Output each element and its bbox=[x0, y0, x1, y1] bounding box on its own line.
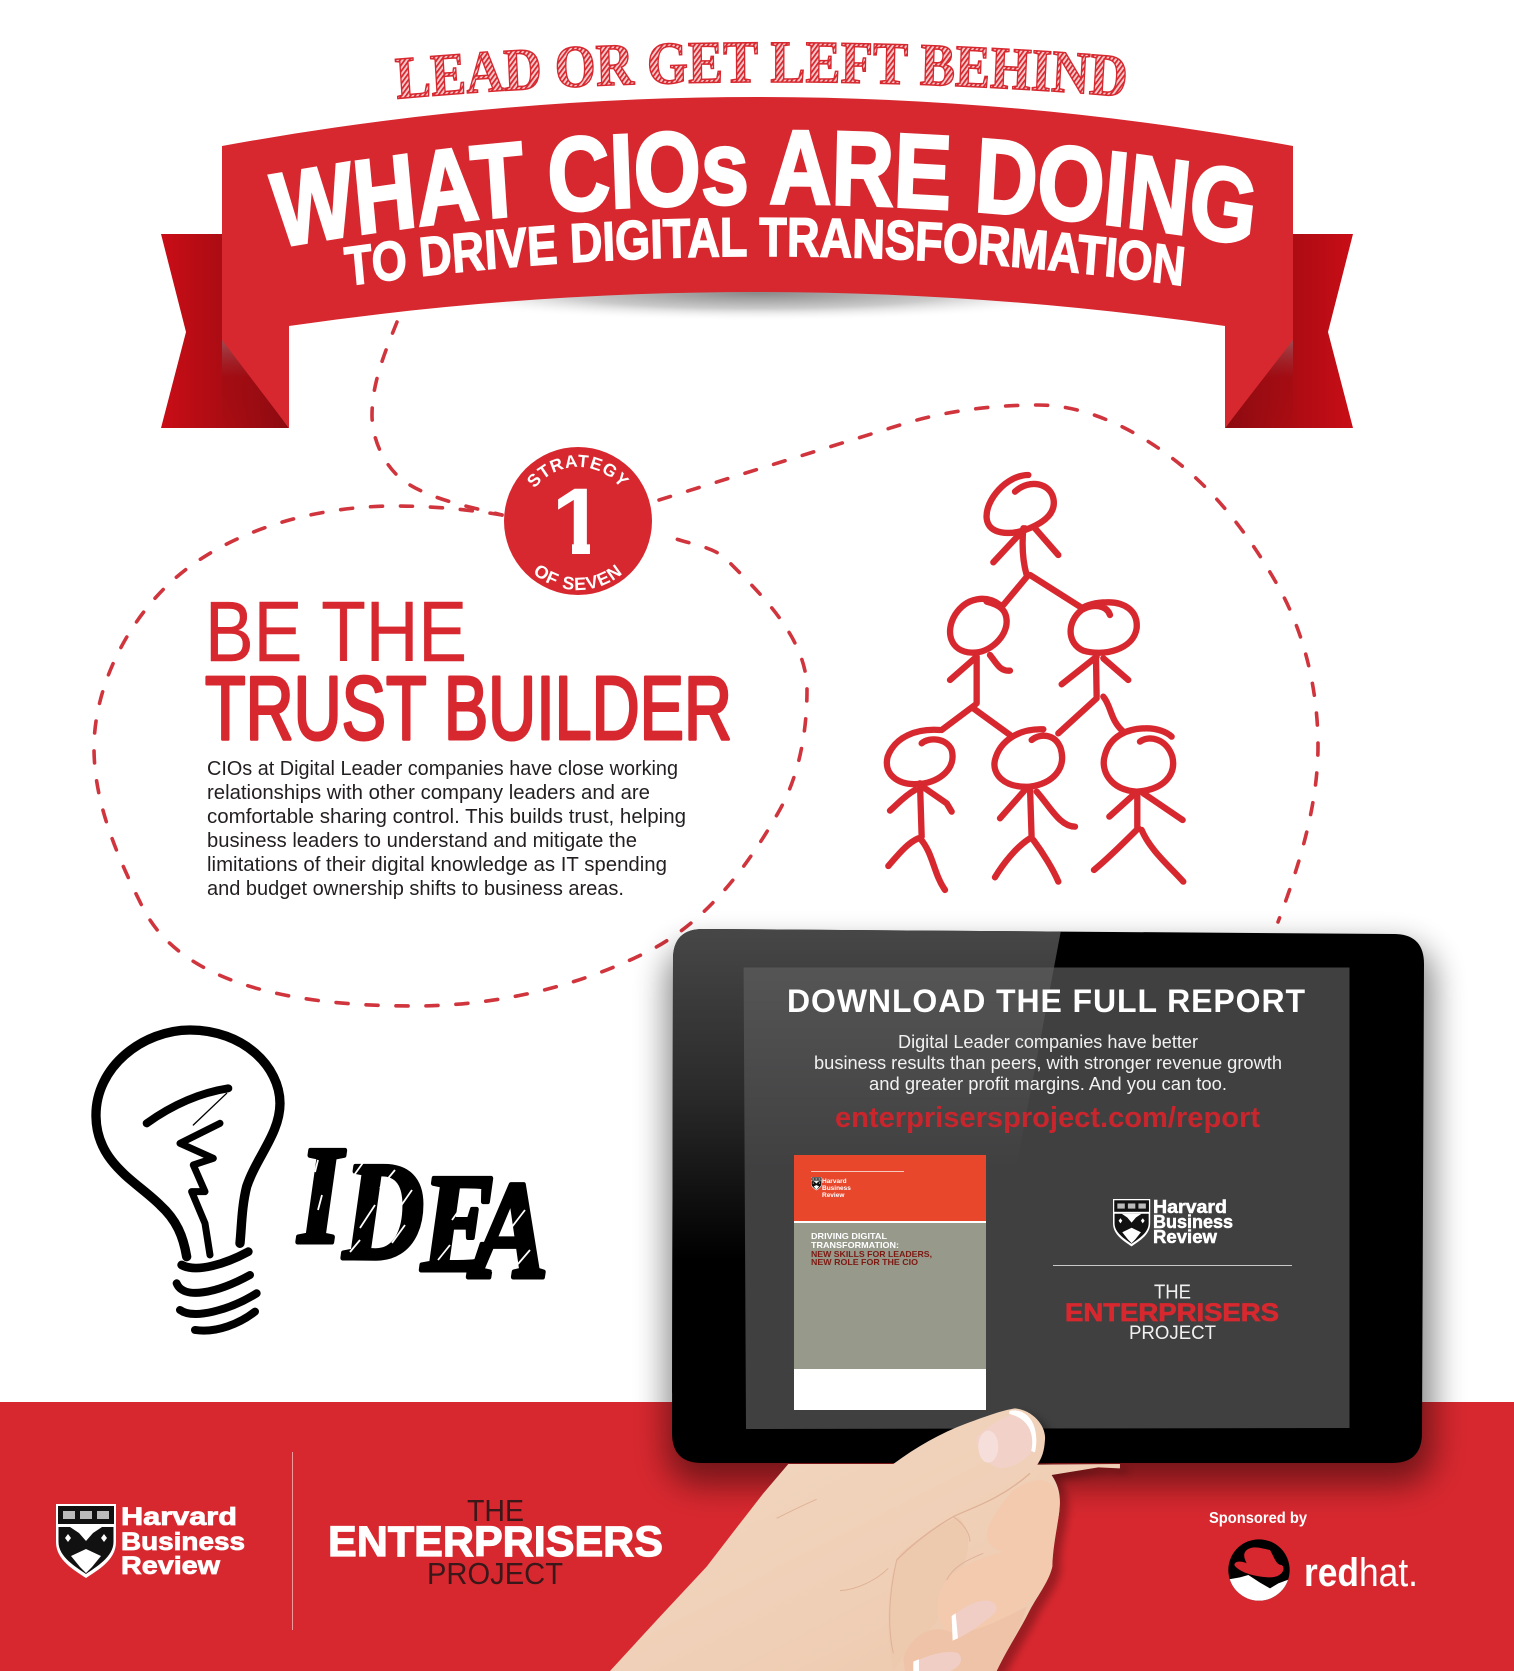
icon: light bulb bbox=[96, 1030, 280, 1331]
subtitle: to drive digital transformation: TO DRIVE DIGITAL TRANSFORMATION bbox=[343, 217, 1184, 286]
report cover bbox=[794, 1155, 986, 1410]
thumbnail bbox=[976, 1410, 1036, 1468]
body text: CIOs at Digital Leader companies have close working bbox=[207, 758, 678, 780]
screen body text bbox=[814, 1031, 1282, 1094]
heading: be the trust builder bbox=[205, 585, 732, 759]
creases bbox=[777, 1499, 983, 1653]
body text: relationships with other company leaders and are bbox=[207, 782, 650, 804]
sponsor: Red Hat: Sponsored by bbox=[1209, 1510, 1307, 1527]
screen body text: and greater profit margins. And you can too. bbox=[869, 1073, 1227, 1094]
body text: and budget ownership shifts to business areas. bbox=[207, 878, 624, 900]
report cover: NEW ROLE FOR THE CIO bbox=[811, 1257, 918, 1267]
shadow under banner bbox=[407, 265, 1107, 321]
icon: pyramid of stick figures bbox=[887, 475, 1183, 890]
ribbon tail: left bbox=[161, 234, 289, 428]
report cover: Business bbox=[822, 1185, 851, 1192]
badge: strategy 1 of seven: STRATEGY bbox=[528, 454, 630, 487]
screen logo: The Enterprisers Project: ENTERPRISERS bbox=[1065, 1299, 1279, 1327]
lower fingernail bbox=[913, 1652, 961, 1671]
footer logo: Harvard Business Review bbox=[56, 1503, 245, 1580]
sponsor: Red Hat: redhat. bbox=[1304, 1551, 1418, 1595]
report cover: DRIVING DIGITAL bbox=[811, 1231, 887, 1241]
badge: strategy 1 of seven: 1 bbox=[552, 469, 604, 575]
dashed path: from banner to badge bbox=[372, 322, 502, 515]
ribbon tail: right bbox=[1225, 234, 1353, 428]
footer logo: The Enterprisers Project: THE bbox=[467, 1493, 524, 1528]
screen logo: The Enterprisers Project: PROJECT bbox=[1129, 1323, 1216, 1344]
heading: be the trust builder: BE THE bbox=[205, 585, 467, 680]
body text: limitations of their digital knowledge as IT spending bbox=[207, 854, 667, 876]
footer logo: The Enterprisers Project bbox=[328, 1493, 663, 1591]
screen heading: DOWNLOAD THE FULL REPORT bbox=[787, 983, 1305, 1019]
index fingernail bbox=[952, 1601, 997, 1641]
screen logo: Harvard Business Review bbox=[1113, 1197, 1233, 1247]
icon: Red Hat shadowman bbox=[1225, 1539, 1292, 1603]
body text: business leaders to understand and mitigate the bbox=[207, 830, 637, 852]
report cover: NEW SKILLS FOR LEADERS, bbox=[811, 1249, 932, 1259]
curled index finger bbox=[937, 1480, 1060, 1635]
screen logo: Harvard Business Review: Harvard bbox=[1153, 1197, 1227, 1217]
report cover: Harvard bbox=[822, 1178, 847, 1185]
screen body text: Digital Leader companies have better bbox=[898, 1031, 1198, 1052]
dashed path: bubble around strategy text bbox=[94, 506, 807, 1006]
lower finger bbox=[903, 1607, 1027, 1671]
footer logo: The Enterprisers Project: ENTERPRISERS bbox=[328, 1518, 663, 1566]
body text: comfortable sharing control. This builds trust, helping bbox=[207, 806, 686, 828]
tablet shadow bbox=[666, 945, 1434, 1485]
tablet bbox=[660, 920, 1424, 1463]
hand shadow on footer bbox=[618, 1413, 1128, 1671]
hand holding tablet bbox=[610, 1408, 1128, 1671]
title: what CIOs are doing: WHAT CIOs ARE DOING bbox=[267, 130, 1254, 246]
footer logo: The Enterprisers Project: PROJECT bbox=[427, 1556, 563, 1591]
hand silhouette bbox=[610, 1408, 1120, 1671]
dashed path: bubble around stick figures bbox=[659, 405, 1318, 922]
screen logo: Harvard Business Review: Review bbox=[1153, 1227, 1218, 1247]
footer logo: Harvard Business Review: Review bbox=[121, 1552, 221, 1580]
badge: strategy 1 of seven bbox=[504, 447, 652, 595]
badge: strategy 1 of seven: OF SEVEN bbox=[535, 564, 622, 590]
sponsor: Red Hat bbox=[1209, 1510, 1418, 1603]
footer logo: Harvard Business Review: Business bbox=[121, 1528, 245, 1556]
banner ribbon bbox=[222, 97, 1293, 428]
footer logo: Harvard Business Review: Harvard bbox=[121, 1503, 237, 1531]
report cover: TRANSFORMATION: bbox=[811, 1240, 899, 1250]
kicker: lead or get left behind: LEAD OR GET LEFT BEHIND bbox=[394, 42, 1126, 100]
palm shading bbox=[888, 1517, 968, 1671]
report cover: Review bbox=[822, 1192, 845, 1199]
screen body text: business results than peers, with stronger revenue growth bbox=[814, 1052, 1282, 1073]
tablet screen bbox=[744, 968, 1350, 1429]
screen logo: The Enterprisers Project bbox=[1065, 1282, 1279, 1344]
report URL: enterprisersproject.com/report bbox=[835, 1102, 1260, 1134]
body text bbox=[207, 758, 686, 900]
screen logo: Harvard Business Review: Business bbox=[1153, 1212, 1233, 1232]
lettering: IDEA: IDEA bbox=[297, 1118, 548, 1308]
screen logo: The Enterprisers Project: THE bbox=[1154, 1282, 1191, 1304]
thumb underside edge bbox=[897, 1473, 1030, 1560]
footer band bbox=[0, 1402, 1514, 1671]
heading: be the trust builder: TRUST BUILDER bbox=[205, 659, 732, 759]
